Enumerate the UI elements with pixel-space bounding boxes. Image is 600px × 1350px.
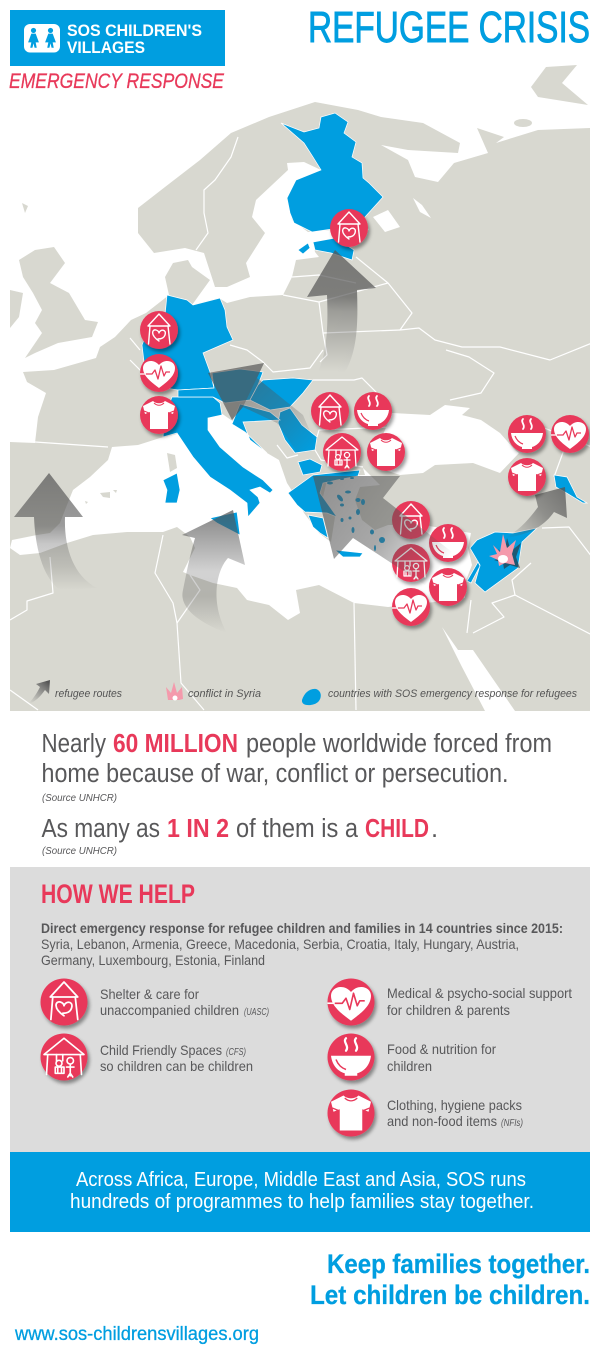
statistics text block: 1 IN 2 (167, 815, 229, 843)
Austria (178, 369, 263, 403)
Lebanon (467, 562, 480, 583)
item: clothing: and non-food items (387, 1113, 497, 1129)
country borders (10, 137, 592, 710)
logo: SOS Children's Villages (10, 10, 225, 66)
item: medical: for children & parents (387, 1002, 510, 1018)
banner: programmes: hundreds of programmes to help families stay together. (70, 1191, 534, 1213)
Serbia (278, 408, 317, 453)
marker: Lebanon shelter (392, 501, 430, 539)
item: clothing (328, 1090, 523, 1136)
legend: refugee routes: refugee routes (55, 688, 122, 700)
legend: refugee routes (28, 680, 122, 704)
Croatia (232, 404, 280, 453)
Germany (142, 295, 233, 390)
arrow: to Armenia (505, 487, 567, 538)
Italy (163, 397, 273, 517)
marker: Lebanon child friendly space (392, 544, 430, 582)
website url: www.sos-childrensvillages.org (14, 1323, 259, 1345)
Armenia (554, 475, 587, 503)
slogan (310, 1249, 590, 1310)
item: child friendly spaces: Child Friendly Spaces (100, 1042, 222, 1058)
marker: Armenia food (508, 415, 546, 453)
legend: conflict in Syria (166, 682, 261, 700)
marker: Finland shelter (330, 209, 368, 247)
countries with SOS response (142, 113, 587, 592)
statistics text block: As many as (42, 815, 160, 843)
arrow: to Spain (14, 473, 88, 583)
Greece (288, 470, 363, 557)
Finland (281, 113, 383, 232)
marker: Lebanon food (429, 524, 467, 562)
arrow: to Hungary (208, 363, 318, 452)
item: shelter: Shelter & care for (100, 986, 199, 1002)
text: countries list: Germany, Luxembourg, Estonia, Finland (41, 952, 265, 968)
legend: conflict in Syria: conflict in Syria (188, 688, 261, 700)
marker: Balkans shelter (311, 392, 349, 430)
item: medical (327, 978, 572, 1026)
legend: countries with SOS response (302, 688, 577, 705)
text: countries list (41, 920, 563, 968)
legend: countries with SOS response: countries with SOS emergency response for refugees (328, 688, 577, 700)
marker: Armenia medical (551, 415, 589, 453)
marker: Balkans food (354, 392, 392, 430)
logo: SOS Children's Villages: SOS CHILDREN'S (67, 22, 202, 40)
text: countries list: Syria, Lebanon, Armenia, Greece, Macedonia, Serbia, Croatia, Italy, Hungary, Austria, (41, 936, 519, 952)
item: child friendly spaces: so children can be children (100, 1058, 253, 1074)
logo: SOS Children's Villages: VILLAGES (67, 39, 145, 57)
statistics text block: 60 MILLION (113, 730, 238, 758)
Estonia (298, 238, 354, 260)
marker: Lebanon medical (392, 588, 430, 626)
map (10, 65, 592, 711)
heading: how we help: HOW WE HELP (41, 879, 195, 909)
statistics text block: (Source UNHCR) (42, 846, 117, 857)
islands and Britain (10, 65, 588, 504)
arrow: to Greece (313, 476, 452, 585)
marker: Lebanon clothing (429, 568, 467, 606)
banner: programmes (10, 1152, 590, 1232)
Hungary (250, 378, 313, 410)
item: shelter: unaccompanied children (100, 1002, 239, 1018)
item: food: children (387, 1058, 432, 1074)
statistics text block (42, 730, 552, 857)
map land base (10, 65, 590, 711)
item: clothing: (NFIs) (501, 1118, 523, 1129)
Aegean islands (327, 477, 385, 551)
marker: Armenia clothing (508, 458, 546, 496)
Sicily (210, 512, 240, 535)
banner: programmes: Across Africa, Europe, Middle East and Asia, SOS runs (76, 1169, 526, 1191)
item: medical: Medical & psycho-social support (387, 985, 572, 1001)
marker: Germany shelter (140, 311, 178, 349)
marker: Balkans clothing (367, 433, 405, 471)
marker: Germany clothing (140, 396, 178, 434)
statistics text block: . (431, 815, 438, 843)
icon: conflict burst in Syria (489, 534, 521, 569)
arrow: to Italy (182, 510, 245, 633)
Syria (470, 528, 537, 592)
marker: Balkans child friendly space (323, 433, 361, 471)
item: shelter (40, 978, 269, 1026)
statistics text block: Nearly (42, 730, 106, 758)
arrow: to Finland (307, 250, 376, 372)
panel: how we help (10, 867, 590, 1152)
item: food: Food & nutrition for (387, 1041, 496, 1057)
header background strip (0, 0, 600, 65)
legend (28, 680, 577, 705)
item: clothing: Clothing, hygiene packs (387, 1097, 522, 1113)
statistics text block: CHILD (365, 815, 429, 843)
statistics text block: people worldwide forced from (246, 730, 552, 758)
seas (10, 65, 590, 711)
marker: Germany medical (140, 354, 178, 392)
item: child friendly spaces: (CFS) (226, 1047, 246, 1058)
statistics text block: home because of war, conflict or persecution. (42, 760, 508, 788)
Macedonia (298, 459, 322, 475)
statistics text block: of them is a (236, 815, 359, 843)
Sardinia (163, 473, 180, 503)
subtitle: emergency response: EMERGENCY RESPONSE (9, 70, 225, 93)
item: shelter: (UASC) (244, 1007, 269, 1018)
item: food (328, 1034, 496, 1080)
statistics text block: (Source UNHCR) (42, 793, 117, 804)
item: child friendly spaces (40, 1034, 253, 1080)
